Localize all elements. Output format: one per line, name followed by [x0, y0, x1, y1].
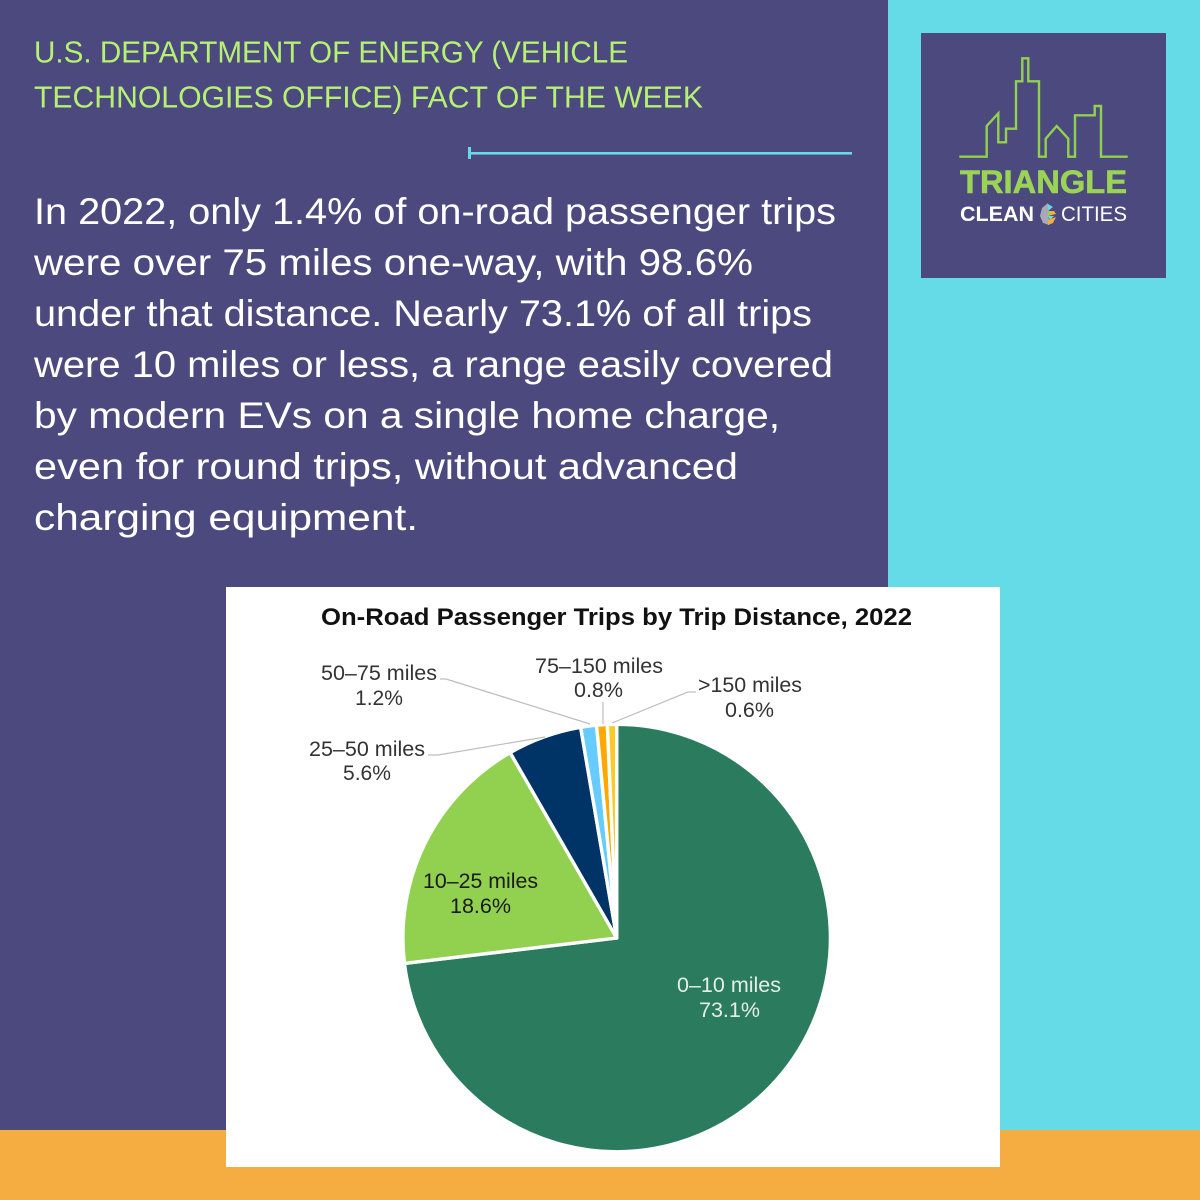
- label: 75–150 miles: [535, 655, 663, 702]
- label: 50–75 miles: [321, 662, 437, 710]
- label: 25–50 miles: 25–50 miles: [309, 738, 425, 761]
- logo word: CITIES: CITIES: [1061, 203, 1127, 226]
- label: 0–10 miles: [677, 974, 781, 1022]
- icon: pinecone: [1040, 203, 1056, 225]
- body text: trip distance summary: In 2022, only 1.4% of on-road passenger trips: [34, 191, 836, 232]
- body text: trip distance summary: by modern EVs on a single home charge,: [34, 395, 780, 436]
- label: 50–75 miles: 1.2%: [355, 687, 403, 710]
- label: >150 miles: [698, 674, 802, 722]
- leader lines: [428, 679, 696, 755]
- icon: city skyline: [959, 58, 1128, 157]
- label: 10–25 miles: [423, 870, 538, 918]
- label: >150 miles: >150 miles: [698, 674, 802, 697]
- label: 50–75 miles: 50–75 miles: [321, 662, 437, 685]
- label: 25–50 miles: [309, 738, 425, 785]
- heading: fact of the week: [34, 34, 703, 114]
- logo word: TRIANGLE: TRIANGLE: [960, 164, 1127, 200]
- label: 25–50 miles: 5.6%: [343, 762, 391, 785]
- label: 10–25 miles: 18.6%: [450, 895, 511, 918]
- slice: >150 miles: [607, 724, 617, 938]
- slice: 0–10 miles: [404, 724, 830, 1152]
- band: orange footer: [0, 1130, 1200, 1200]
- body text: trip distance summary: were 10 miles or less, a range easily covered: [33, 344, 833, 385]
- chart title: On-Road Passenger Trips by Trip Distance, 2022: [321, 604, 912, 631]
- heading: fact of the week: TECHNOLOGIES OFFICE) FACT OF THE WEEK: [34, 80, 703, 114]
- slice: 50–75 miles: [581, 725, 617, 938]
- divider line with tick: [468, 147, 852, 159]
- panel: chart card: [226, 587, 1000, 1167]
- label: 75–150 miles: 75–150 miles: [535, 655, 663, 678]
- panel: purple content area: [0, 0, 888, 1130]
- label: >150 miles: 0.6%: [725, 699, 774, 722]
- logo: Triangle Clean Cities: [921, 33, 1166, 278]
- label: 10–25 miles: 10–25 miles: [423, 870, 538, 893]
- pie chart: trip distance shares: [403, 724, 830, 1152]
- label: 0–10 miles: 73.1%: [699, 999, 760, 1022]
- label: 75–150 miles: 0.8%: [574, 679, 623, 702]
- card background: [226, 587, 1000, 1167]
- logo word: CLEAN: CLEAN: [960, 203, 1034, 226]
- body text: trip distance summary: [33, 191, 836, 538]
- body text: trip distance summary: even for round trips, without advanced: [34, 446, 738, 487]
- body text: trip distance summary: charging equipment.: [34, 497, 418, 538]
- slice: 25–50 miles: [510, 727, 617, 938]
- logo background: [921, 33, 1166, 278]
- label: 0–10 miles: 0–10 miles: [677, 974, 781, 997]
- body text: trip distance summary: under that distance. Nearly 73.1% of all trips: [34, 293, 812, 334]
- slice: 75–150 miles: [597, 724, 617, 938]
- body text: trip distance summary: were over 75 miles one-way, with 98.6%: [33, 242, 753, 283]
- slice: 10–25 miles: [403, 753, 617, 963]
- heading: fact of the week: U.S. DEPARTMENT OF ENERGY (VEHICLE: [34, 34, 628, 70]
